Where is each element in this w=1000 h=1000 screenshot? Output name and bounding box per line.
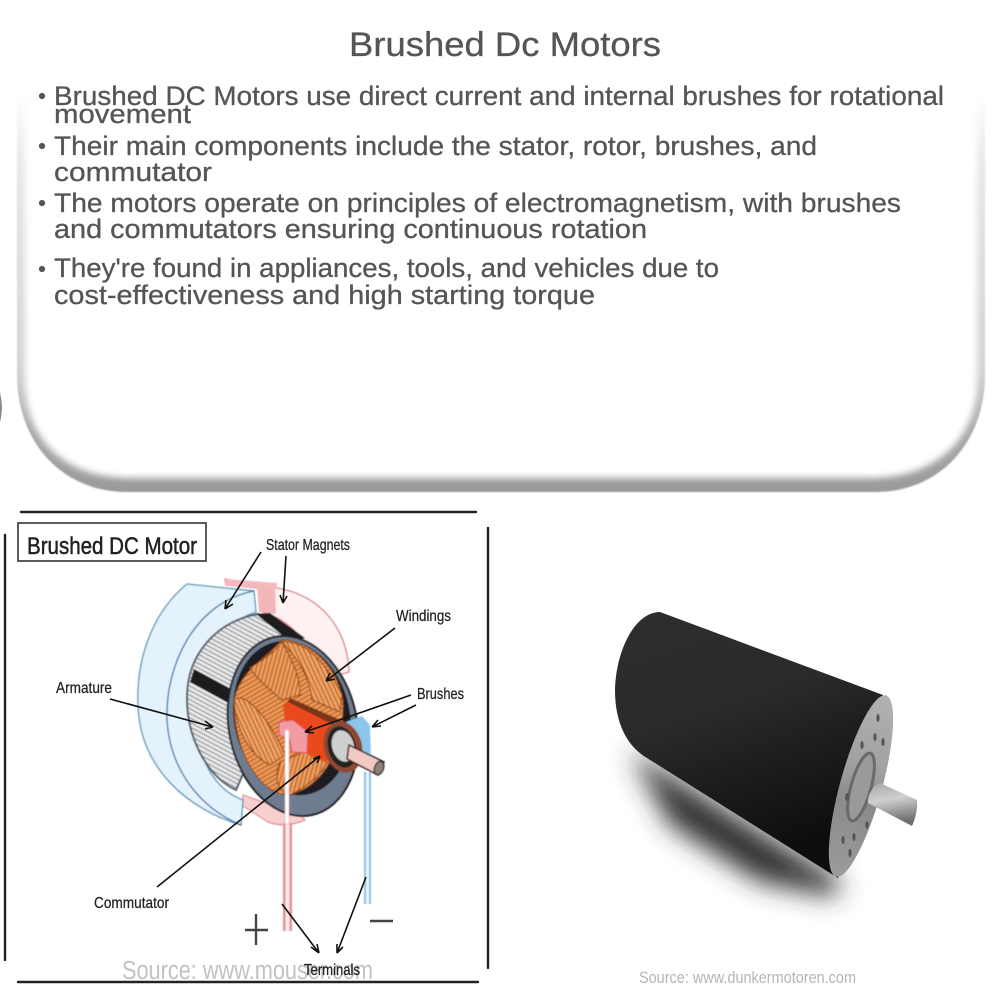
labels: Brushes (417, 686, 464, 703)
armature (187, 613, 305, 790)
blue terminal wire (364, 772, 371, 904)
bullet 1: Brushed DC Motors use direct current and internal brushes for rotational (54, 81, 944, 111)
source caption: Source: www.dunkermotoren.com (639, 968, 856, 987)
stator ring (211, 624, 375, 828)
labels: Commutator (94, 895, 170, 912)
text block: bullet list (39, 81, 944, 310)
cast shadow (630, 750, 840, 897)
labels: Windings (396, 608, 451, 625)
brush red (279, 720, 308, 753)
bullet 2: commutator (54, 157, 212, 187)
labels: Armature (56, 680, 112, 697)
plus and minus signs (245, 914, 393, 945)
bullet 3 (39, 188, 901, 244)
brush blue (346, 716, 371, 760)
bearing and shaft (318, 717, 386, 777)
end face (816, 690, 906, 882)
panel: motor photo (615, 612, 917, 987)
bullet 1 (39, 81, 944, 129)
pink stator magnet (225, 579, 349, 825)
image frame (5, 512, 488, 982)
motor body (615, 612, 883, 878)
bullet 3: The motors operate on principles of electromagnetism, with brushes (54, 188, 901, 218)
labels: Stator Magnets (266, 537, 350, 554)
bullet 4: cost-effectiveness and high starting torque (54, 280, 595, 310)
bullet 3: and commutators ensuring continuous rotation (54, 214, 647, 244)
heading box (18, 523, 206, 561)
labels (56, 537, 464, 979)
heading box: Brushed DC Motor (27, 533, 197, 560)
blue stator magnet (138, 584, 256, 825)
motor illustration (138, 579, 386, 931)
labels: Terminals (304, 962, 360, 979)
output shaft (868, 783, 917, 826)
source caption: Source: www.mouser.com (122, 957, 373, 985)
bullet 4: They're found in appliances, tools, and vehicles due to (54, 253, 719, 283)
panel: text card with soft rounded shadow (0, 0, 1000, 492)
red terminal wire (283, 730, 292, 931)
commutator (283, 698, 345, 762)
title: Brushed Dc Motors (349, 26, 661, 64)
bullet 1: movement (54, 99, 192, 129)
bullet 2: Their main components include the stator, rotor, brushes, and (54, 131, 817, 161)
bullet 2 (39, 131, 817, 187)
pointer arrows (110, 552, 416, 953)
bullet 4 (39, 253, 719, 310)
panel: brushed DC motor diagram (5, 512, 488, 985)
windings (234, 640, 343, 795)
